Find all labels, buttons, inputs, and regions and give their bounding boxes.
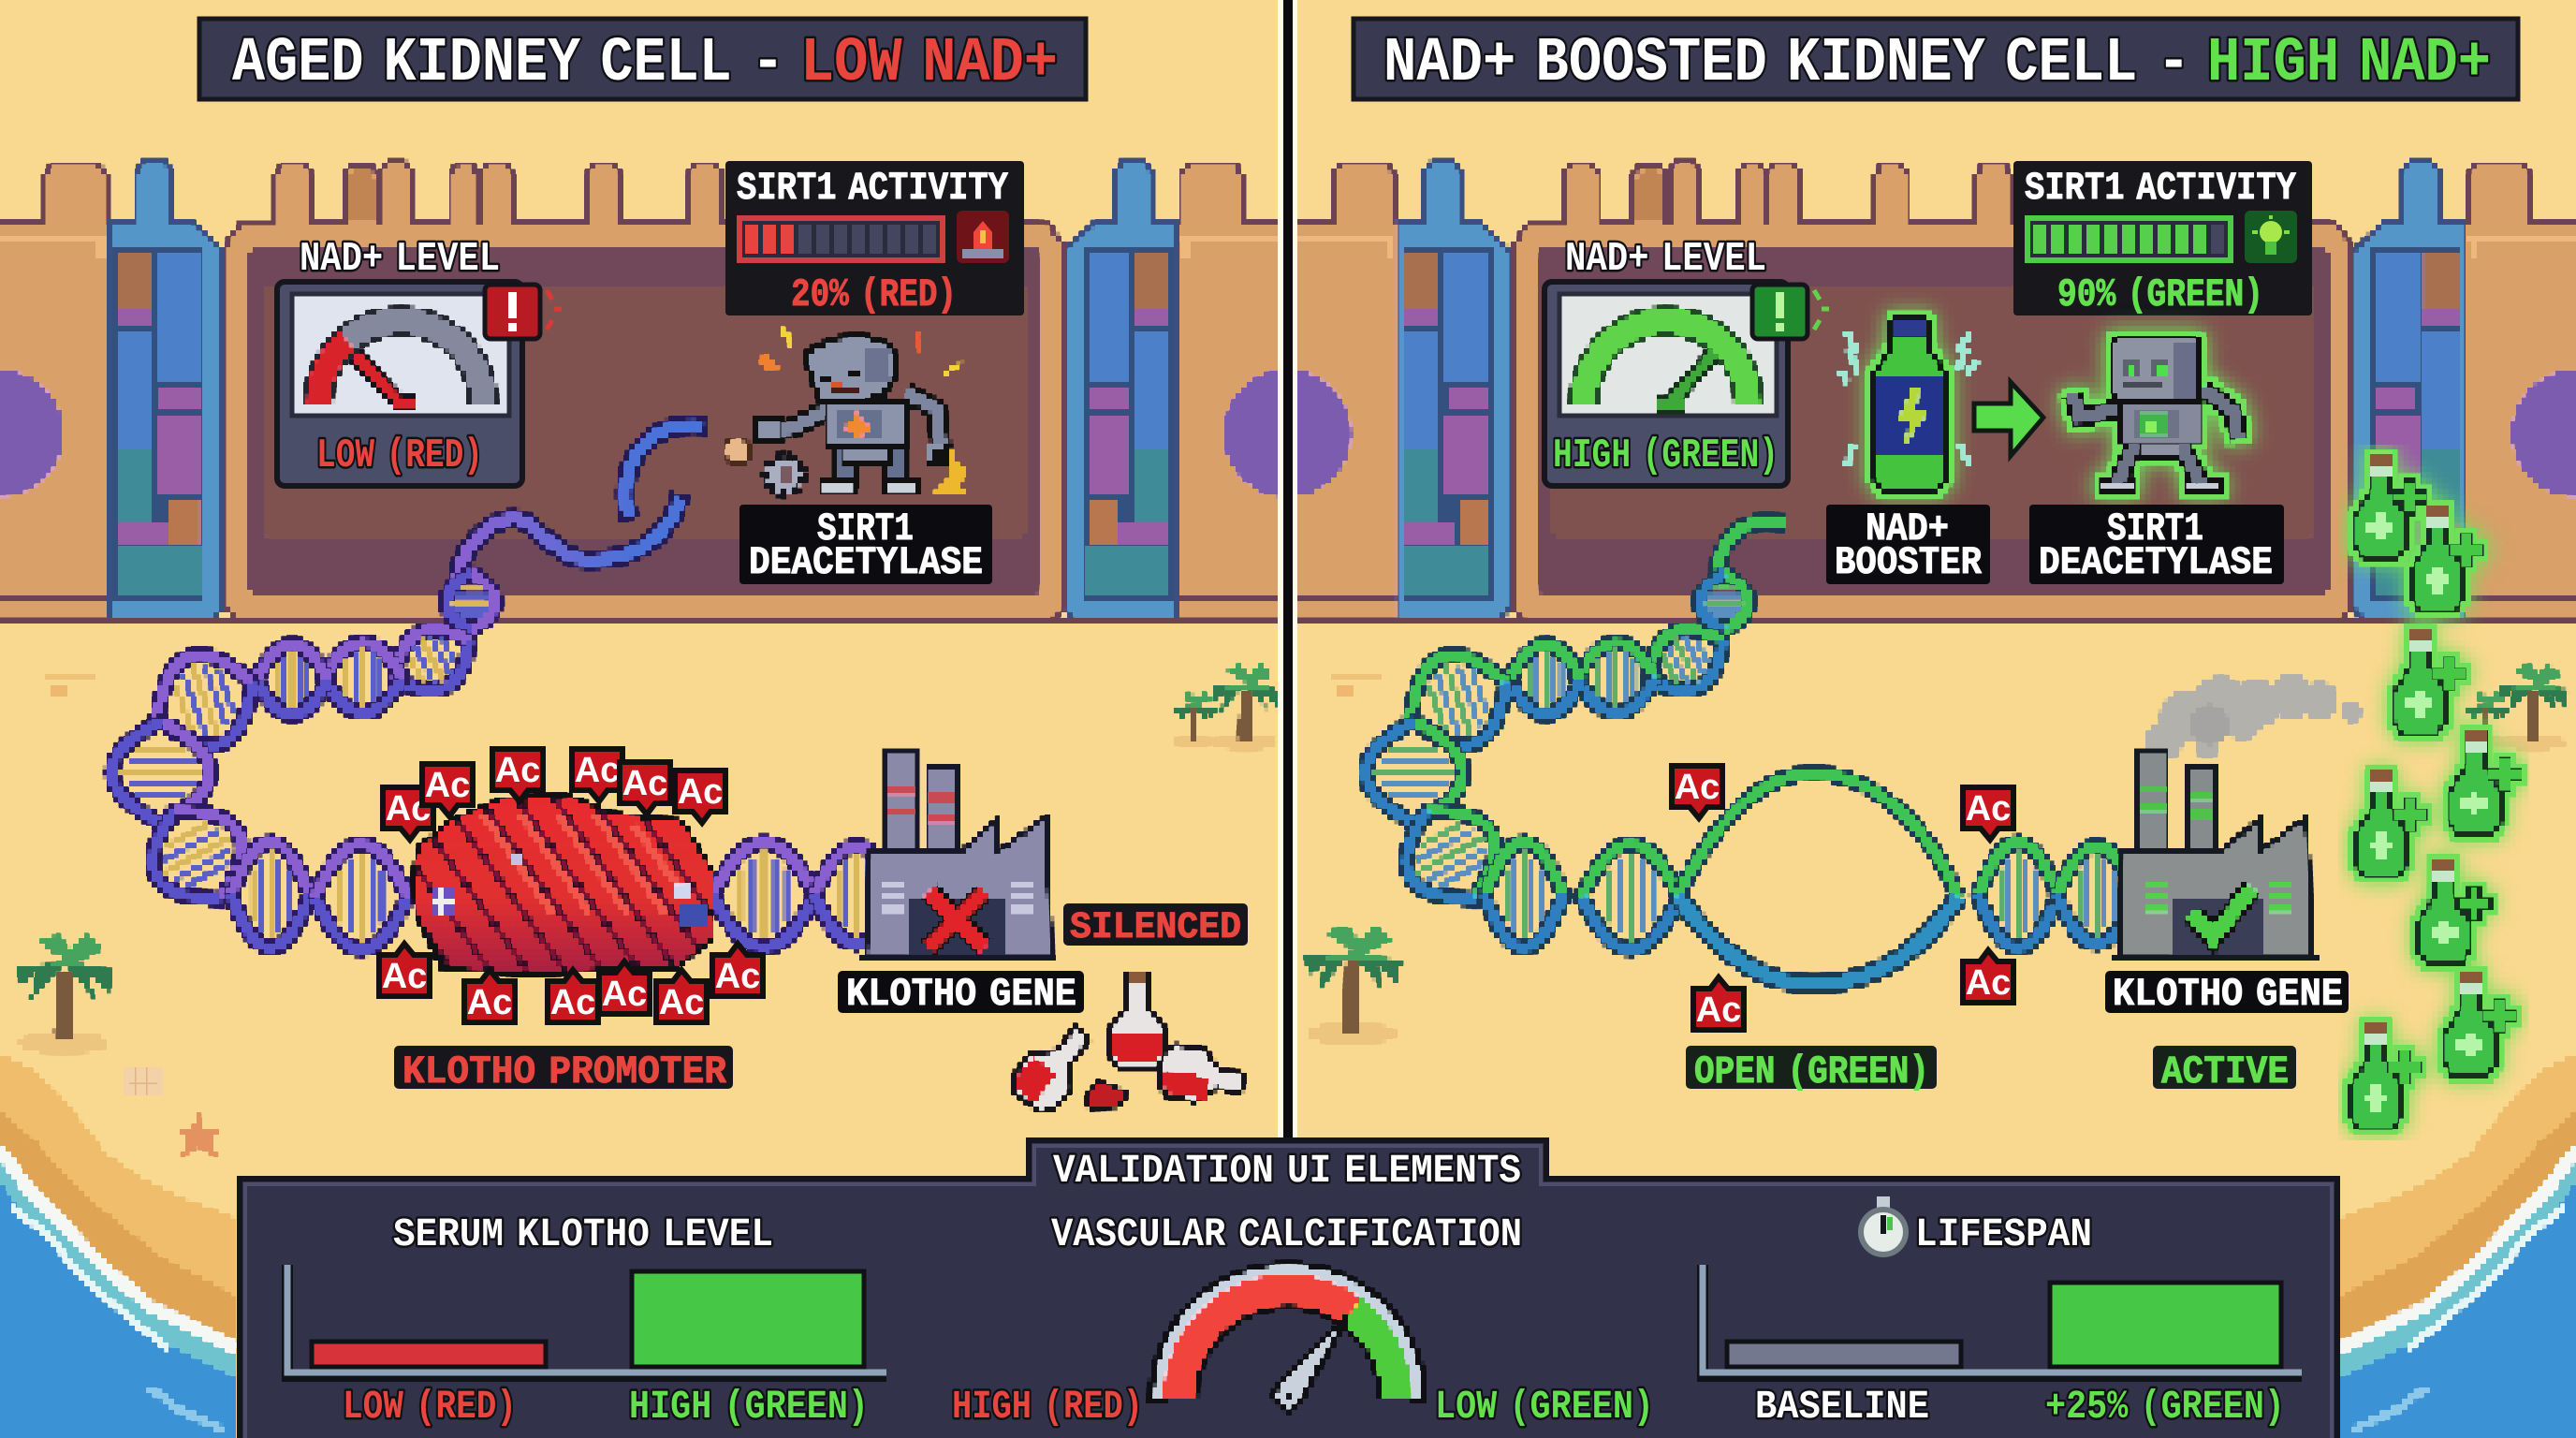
title: NAD+ boosted kidney cell <box>1354 19 2518 99</box>
icon: stopwatch <box>1861 1196 1906 1255</box>
NAD+ gauge, high: HIGH (GREEN) <box>1553 433 1778 479</box>
rock <box>724 438 751 464</box>
glowing green flasks <box>2349 452 2522 1129</box>
panel: aged kidney cell scene <box>0 161 1351 1157</box>
icon: healthy SIRT1 robot <box>2072 337 2239 492</box>
activity bar <box>2027 218 2231 260</box>
alarm badge, red <box>485 285 562 339</box>
tab heading: VALIDATION UI ELEMENTS <box>1053 1148 1521 1194</box>
acetyl tags on coil: Ac <box>550 983 595 1022</box>
removed acetyl tags: Ac <box>1966 963 2011 1003</box>
acetyl tags on coil: Ac <box>659 983 704 1022</box>
title: aged kidney cell: LOW NAD+ <box>800 28 1058 99</box>
removed acetyl tags <box>1672 766 2013 1030</box>
acetyl tags on coil: Ac <box>382 957 427 996</box>
left arm <box>764 409 827 433</box>
green tail <box>1719 521 1785 588</box>
panel: boosted kidney cell scene <box>1224 161 2576 1129</box>
serum Klotho chart: HIGH (GREEN) <box>629 1384 869 1430</box>
vascular calcification gauge: HIGH (RED) <box>952 1384 1143 1430</box>
acetyl tags on coil: Ac <box>715 957 760 996</box>
acetyl tags on coil <box>379 749 763 1022</box>
label: SIRT1 deacetylase left: DEACETYLASE <box>749 540 983 585</box>
serum Klotho chart: SERUM KLOTHO LEVEL <box>393 1211 773 1257</box>
title: NAD+ boosted kidney cell: HIGH NAD+ <box>2207 28 2491 99</box>
activity bar <box>739 218 943 260</box>
label: SIRT1 deacetylase left: SIRT1 <box>817 506 914 551</box>
right arm <box>906 393 942 448</box>
SIRT1 activity panel, 90%: 90% (GREEN) <box>2057 272 2263 317</box>
label: SIRT1 deacetylase left <box>739 505 992 585</box>
DNA lobes either side of coil <box>315 843 899 949</box>
kidney cell wall, left <box>0 162 1351 624</box>
acetyl tags on coil: Ac <box>467 983 512 1022</box>
NAD+ level heading, left: NAD+ LEVEL <box>300 236 500 283</box>
label: active: ACTIVE <box>2161 1049 2289 1094</box>
broken red flasks <box>1006 970 1247 1118</box>
factory smoke <box>2145 674 2362 760</box>
DNA helix, right panel <box>1366 521 2137 984</box>
SIRT1 activity panel, 20% <box>725 161 1024 317</box>
label: NAD+ booster: NAD+ <box>1866 506 1949 551</box>
DNA lobes and open bubble <box>1582 773 2137 984</box>
vascular calcification gauge: VASCULAR CALCIFICATION <box>1051 1211 1522 1257</box>
removed acetyl tags: Ac <box>1966 789 2011 829</box>
acetyl tags on coil: Ac <box>602 975 647 1014</box>
dropped gear <box>766 456 803 493</box>
panel: validation UI elements <box>240 1140 2337 1438</box>
central divider <box>1278 0 1297 1142</box>
alarm badge, green <box>1752 285 1829 339</box>
vascular calcification gauge <box>952 1211 1654 1430</box>
label: Klotho gene right: KLOTHO GENE <box>2113 972 2343 1017</box>
kidney cell wall, right <box>1224 162 2576 624</box>
palm trees, right panel <box>1305 664 2569 1045</box>
label: Klotho gene left: KLOTHO GENE <box>846 972 1076 1017</box>
sparks <box>760 324 968 492</box>
title: NAD+ boosted kidney cell: NAD+ BOOSTED KIDNEY CELL - <box>1383 28 2190 99</box>
open promoter bubble <box>1677 773 1958 984</box>
lifespan chart: LIFESPAN <box>1915 1211 2092 1257</box>
lifespan chart <box>1703 1196 2302 1430</box>
label: Klotho promoter: KLOTHO PROMOTER <box>402 1049 727 1094</box>
acetyl tags on coil: Ac <box>575 751 620 790</box>
title: aged kidney cell: AGED KIDNEY CELL - <box>232 28 784 99</box>
SIRT1 activity panel, 20%: 20% (RED) <box>791 272 957 317</box>
SIRT1 activity panel, 20%: SIRT1 ACTIVITY <box>737 166 1009 211</box>
acetyl tags on coil: Ac <box>678 772 723 812</box>
SIRT1 activity panel, 90% <box>2013 161 2312 317</box>
NAD+ gauge, low: LOW (RED) <box>316 433 483 479</box>
active factory: Klotho gene <box>2114 753 2319 961</box>
DNA strand upper and left <box>112 573 495 947</box>
lifespan chart: BASELINE <box>1755 1384 1929 1430</box>
sparks around bottle <box>1840 330 1977 468</box>
label: NAD+ booster: BOOSTER <box>1835 540 1983 585</box>
label: SIRT1 deacetylase right: DEACETYLASE <box>2039 540 2273 585</box>
acetyl tags on coil: Ac <box>495 751 540 790</box>
SIRT1 activity panel, 90%: SIRT1 ACTIVITY <box>2025 166 2297 211</box>
NAD+ level heading, right: NAD+ LEVEL <box>1565 236 1766 283</box>
removed acetyl tags: Ac <box>1696 990 1741 1030</box>
label: SIRT1 deacetylase right: SIRT1 <box>2107 506 2203 551</box>
label: silenced: SILENCED <box>1070 907 1241 949</box>
legs <box>836 447 856 486</box>
NAD+ gauge, high <box>1544 282 1788 486</box>
palm trees, left panel <box>17 664 1281 1054</box>
acetyl tags on coil: Ac <box>425 766 470 805</box>
icon: siren <box>957 211 1009 263</box>
DNA strand upper and left <box>1366 573 1749 947</box>
arrow: booster to SIRT1 <box>1974 382 2043 456</box>
body <box>827 403 908 448</box>
title: aged kidney cell <box>199 19 1086 99</box>
label: open: OPEN (GREEN) <box>1694 1049 1929 1094</box>
serum Klotho chart <box>287 1211 886 1430</box>
label: NAD+ booster <box>1826 505 1990 585</box>
uncoiling DNA tail <box>457 425 698 585</box>
acetyl tags on coil: Ac <box>622 764 667 803</box>
vascular calcification gauge: LOW (GREEN) <box>1435 1384 1654 1430</box>
icon: broken SIRT1 robot <box>724 324 968 493</box>
NAD+ gauge, low <box>277 282 522 486</box>
wrench claw <box>756 419 781 442</box>
icon: NAD+ booster bottle <box>1840 317 1977 491</box>
seashell and starfish <box>45 672 223 1157</box>
head <box>805 334 896 403</box>
panel: left beach corner <box>0 1054 238 1438</box>
lifespan chart: +25% (GREEN) <box>2045 1384 2285 1430</box>
condensed red chromatin coil <box>410 792 713 977</box>
label: SIRT1 deacetylase right <box>2029 505 2284 585</box>
DNA helix, left panel <box>112 425 899 949</box>
panel: right beach corner <box>2338 1054 2576 1438</box>
acetyl tags on coil: Ac <box>386 789 431 829</box>
silenced factory: Klotho gene <box>860 753 1055 961</box>
icon: light bulb <box>2245 211 2297 263</box>
serum Klotho chart: LOW (RED) <box>343 1384 517 1430</box>
removed acetyl tags: Ac <box>1675 768 1720 807</box>
